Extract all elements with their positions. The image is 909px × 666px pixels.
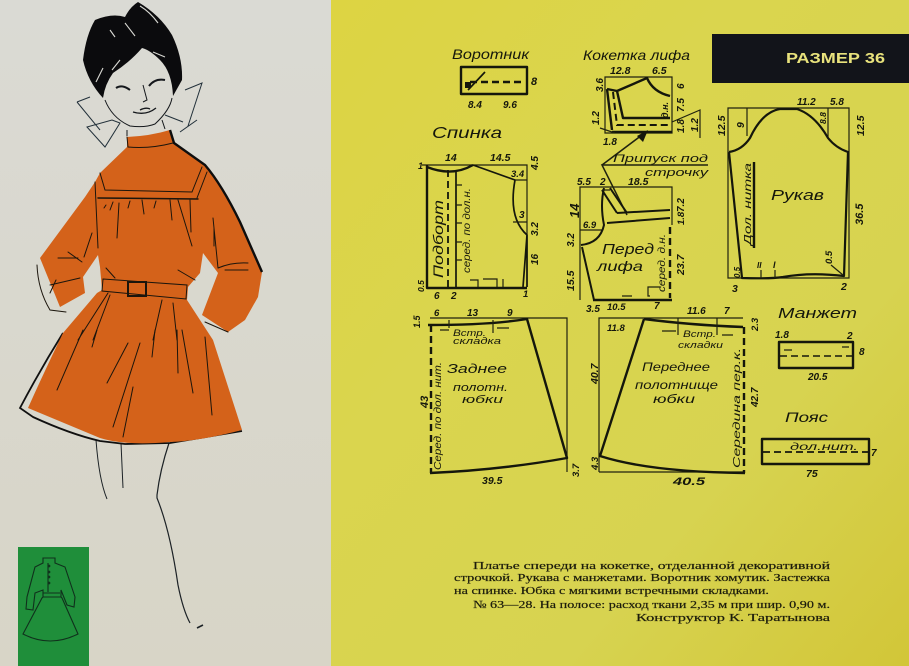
pattern: back skirt panel: 43 (419, 396, 431, 409)
pattern: sleeve: I (773, 260, 776, 270)
pattern: sleeve: 11.2 (797, 97, 816, 108)
size banner (712, 34, 909, 83)
pattern: back skirt panel: 6 (434, 308, 440, 319)
pattern: back bodice: 3 (519, 210, 525, 221)
pattern: front skirt panel: 40.7 (589, 362, 601, 385)
pattern: front bodice: 1.8 (676, 211, 687, 225)
pattern: front bodice: 5.5 (577, 177, 591, 188)
pattern: belt: дол.нит. (790, 442, 858, 453)
pattern: collar: 8 (531, 76, 538, 88)
orange dress (28, 130, 262, 443)
pattern: front bodice: 15.5 (565, 270, 577, 291)
pattern: back skirt panel: 1.5 (412, 314, 422, 328)
pattern: back skirt panel: 13 (467, 308, 479, 319)
belt (102, 279, 187, 299)
pattern: back bodice: 6 (434, 291, 440, 302)
pattern: back bodice: 1 (418, 161, 423, 171)
pattern: yoke (583, 47, 701, 148)
pattern: front skirt panel: полотнище (635, 380, 718, 392)
pattern: cuff: 1.8 (775, 330, 789, 341)
pattern: back skirt panel: юбки (462, 394, 503, 406)
pattern: back bodice (416, 125, 541, 302)
pattern: front skirt panel: 2.3 (750, 317, 761, 332)
pattern: yoke: 1.2 (591, 111, 602, 125)
pattern: back skirt panel: Заднее (447, 361, 507, 376)
pattern: sleeve: II (757, 261, 762, 270)
pattern: back skirt panel (412, 308, 582, 487)
legs (96, 440, 203, 628)
pattern: sleeve: Дол. нитка (742, 163, 754, 246)
description text block: № 63—28. На полосе: расход ткани 2,35 м при шир. 0,90 м. (473, 599, 830, 611)
pattern: sleeve: 0.5 (824, 250, 835, 264)
left paper panel (0, 0, 331, 666)
pattern: front bodice: 3.2 (566, 233, 577, 247)
pattern: sleeve: 2 (840, 281, 847, 293)
dress back icon (23, 558, 78, 641)
pattern: front bodice: 6.9 (583, 220, 597, 231)
pattern: back bodice: 2 (450, 291, 457, 302)
pattern: back bodice: 14.5 (490, 152, 511, 164)
pattern: front skirt panel: юбки (653, 394, 696, 406)
pattern: cuff (775, 305, 865, 383)
pattern: cuff: 8 (859, 347, 865, 358)
pattern: belt: Пояс (785, 409, 828, 425)
pattern: back bodice: 14 (445, 152, 457, 164)
pattern: back bodice: 1 (523, 289, 528, 300)
pattern: yoke: 1.8 (603, 137, 617, 148)
pattern: yoke: 6 (676, 83, 687, 89)
face (105, 80, 172, 136)
description text block: строчкой. Рукава с манжетами. Воротник хомутик. Застежка (454, 572, 830, 584)
pattern: front skirt panel: 11.8 (607, 323, 626, 334)
size banner: РАЗМЕР 36 (786, 51, 885, 67)
pattern: back skirt panel: полотн. (453, 382, 508, 394)
right yellow panel (331, 0, 909, 666)
pattern: back bodice: серед. по дол.н. (461, 188, 473, 273)
skirt ink outline (20, 333, 242, 444)
pattern: sleeve: 12.5 (855, 115, 867, 136)
pattern: back skirt panel: 9 (507, 308, 513, 319)
pattern: yoke: Кокетка лифа (583, 47, 690, 63)
arrow: seam allowance callout: строчку (645, 167, 710, 179)
pattern: front bodice: лифа (596, 258, 643, 274)
pattern: back bodice: 0.5 (416, 280, 426, 292)
pattern: front bodice: 7.2 (676, 198, 687, 212)
description text block: на спинке. Юбка с мягкими встречными складками. (454, 585, 769, 597)
pattern: back skirt panel: 39.5 (482, 475, 503, 487)
small green card with dress back view (18, 547, 89, 666)
hair highlights (96, 6, 165, 82)
pattern: collar: Воротник (452, 46, 531, 62)
pattern: sleeve: 8.8 (818, 112, 828, 124)
pattern: back bodice: 4.5 (530, 156, 541, 171)
pattern: front skirt panel: 4.3 (590, 456, 601, 471)
pattern: back skirt panel: Встр. (453, 328, 486, 339)
pattern: back bodice: 16 (530, 253, 541, 265)
hair (83, 2, 182, 98)
pattern: front skirt panel: 11.6 (687, 306, 706, 317)
bow (77, 83, 202, 147)
description text block (454, 560, 830, 624)
pattern: sleeve: 12.5 (716, 115, 728, 136)
pattern: belt: 7 (871, 448, 877, 459)
pattern: front bodice: 14 (567, 203, 582, 218)
pattern: cuff: 20.5 (807, 372, 828, 383)
pattern: front skirt panel (586, 301, 761, 488)
pattern: front bodice: Перед (602, 241, 654, 258)
arrow: seam allowance callout (602, 130, 710, 215)
pattern: back skirt panel: Серед. по дол. нит. (433, 362, 444, 470)
pattern: front skirt panel: Встр. (683, 329, 716, 340)
pattern: back bodice: Спинка (432, 125, 502, 142)
pattern: sleeve: 36.5 (854, 203, 866, 225)
pattern: back bodice: 3.4 (511, 169, 525, 180)
pattern: sleeve: 0.5 (733, 266, 742, 278)
pattern: collar: 9.6 (503, 100, 517, 111)
pattern: yoke: 3.6 (595, 78, 606, 92)
pattern: cuff: 2 (846, 331, 853, 342)
illustration: girl in orange dress (20, 2, 262, 628)
pattern: front bodice: 18.5 (628, 176, 649, 188)
pattern: sleeve: Рукав (771, 187, 824, 204)
pattern: front skirt panel: 7 (724, 306, 730, 317)
pattern: cuff: Манжет (778, 305, 857, 322)
pattern: sleeve: 3 (732, 283, 738, 295)
pattern: yoke: 7.5 (676, 98, 687, 112)
pattern: sleeve: 5.8 (830, 97, 844, 108)
description text block: Платье спереди на кокетке, отделанной декоративной (473, 560, 830, 572)
pattern: back skirt panel: 3.7 (571, 463, 582, 477)
pattern: front skirt panel: складки (678, 340, 724, 351)
pattern: front bodice: серед. д.н. (657, 234, 668, 292)
pattern: front bodice: 23.7 (675, 253, 687, 276)
pattern: yoke: 1.8 (676, 119, 687, 133)
pattern: collar: 8.4 (468, 100, 482, 111)
pattern: sleeve: 9 (735, 122, 747, 128)
arrow: seam allowance callout: Припуск под (613, 153, 708, 165)
pattern: front skirt panel: 10.5 (607, 302, 626, 313)
pattern: front bodice (565, 176, 687, 300)
pattern: front skirt panel: 7 (654, 301, 660, 312)
pattern: yoke: д.н. (660, 102, 670, 118)
pattern: belt: 75 (806, 468, 818, 480)
pattern: back bodice: 3.2 (530, 222, 541, 236)
pattern: yoke: 6.5 (652, 65, 667, 77)
pattern: yoke: 12.8 (610, 65, 631, 77)
pattern: front bodice: 2 (599, 177, 606, 188)
pattern: collar (452, 46, 538, 111)
pattern: front skirt panel: 40.5 (672, 476, 706, 488)
pattern: yoke: 1.2 (690, 118, 701, 132)
pattern: front skirt panel: Переднее (642, 362, 710, 374)
pattern: back bodice: Подборт (430, 200, 446, 278)
pattern: front skirt panel: Середина пер.к. (731, 348, 743, 468)
pattern: belt (762, 409, 877, 480)
dress details (37, 137, 248, 437)
pattern: back skirt panel: складка (453, 336, 501, 347)
pattern: front skirt panel: 3.5 (586, 304, 600, 315)
pattern: front skirt panel: 42.7 (750, 387, 761, 408)
description text block: Конструктор К. Таратынова (636, 612, 830, 624)
back ink shadow (170, 130, 262, 272)
pattern: sleeve (716, 97, 867, 295)
